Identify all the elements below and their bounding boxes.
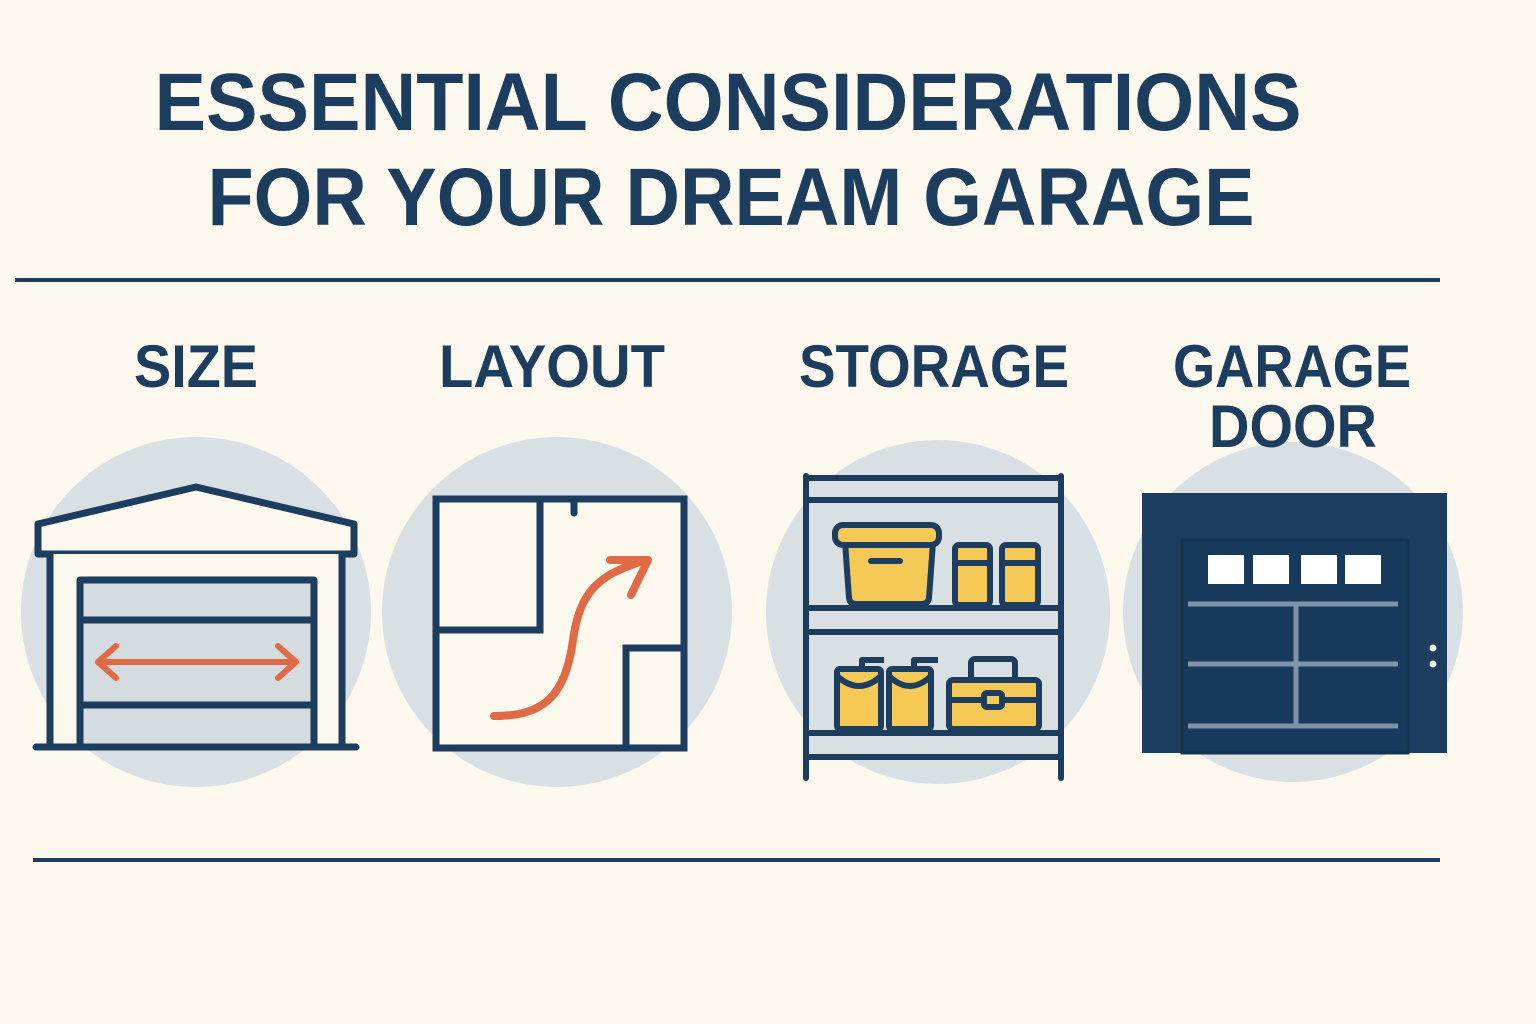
labels: SIZE: [134, 333, 258, 400]
icon: storage shelf: [806, 476, 1061, 778]
icon: garage door: [1142, 493, 1447, 753]
icon: garage size: [36, 487, 356, 747]
circles: [21, 437, 1463, 787]
labels: STORAGE: [799, 333, 1069, 400]
title: ESSENTIAL CONSIDERATIONS: [154, 57, 1302, 148]
labels: DOOR: [1209, 393, 1377, 460]
labels: GARAGE: [1173, 333, 1411, 400]
icon: layout: [436, 499, 684, 748]
title: [154, 57, 1302, 243]
title: FOR YOUR DREAM GARAGE: [208, 152, 1254, 243]
labels: [134, 333, 1411, 460]
labels: LAYOUT: [439, 333, 665, 400]
